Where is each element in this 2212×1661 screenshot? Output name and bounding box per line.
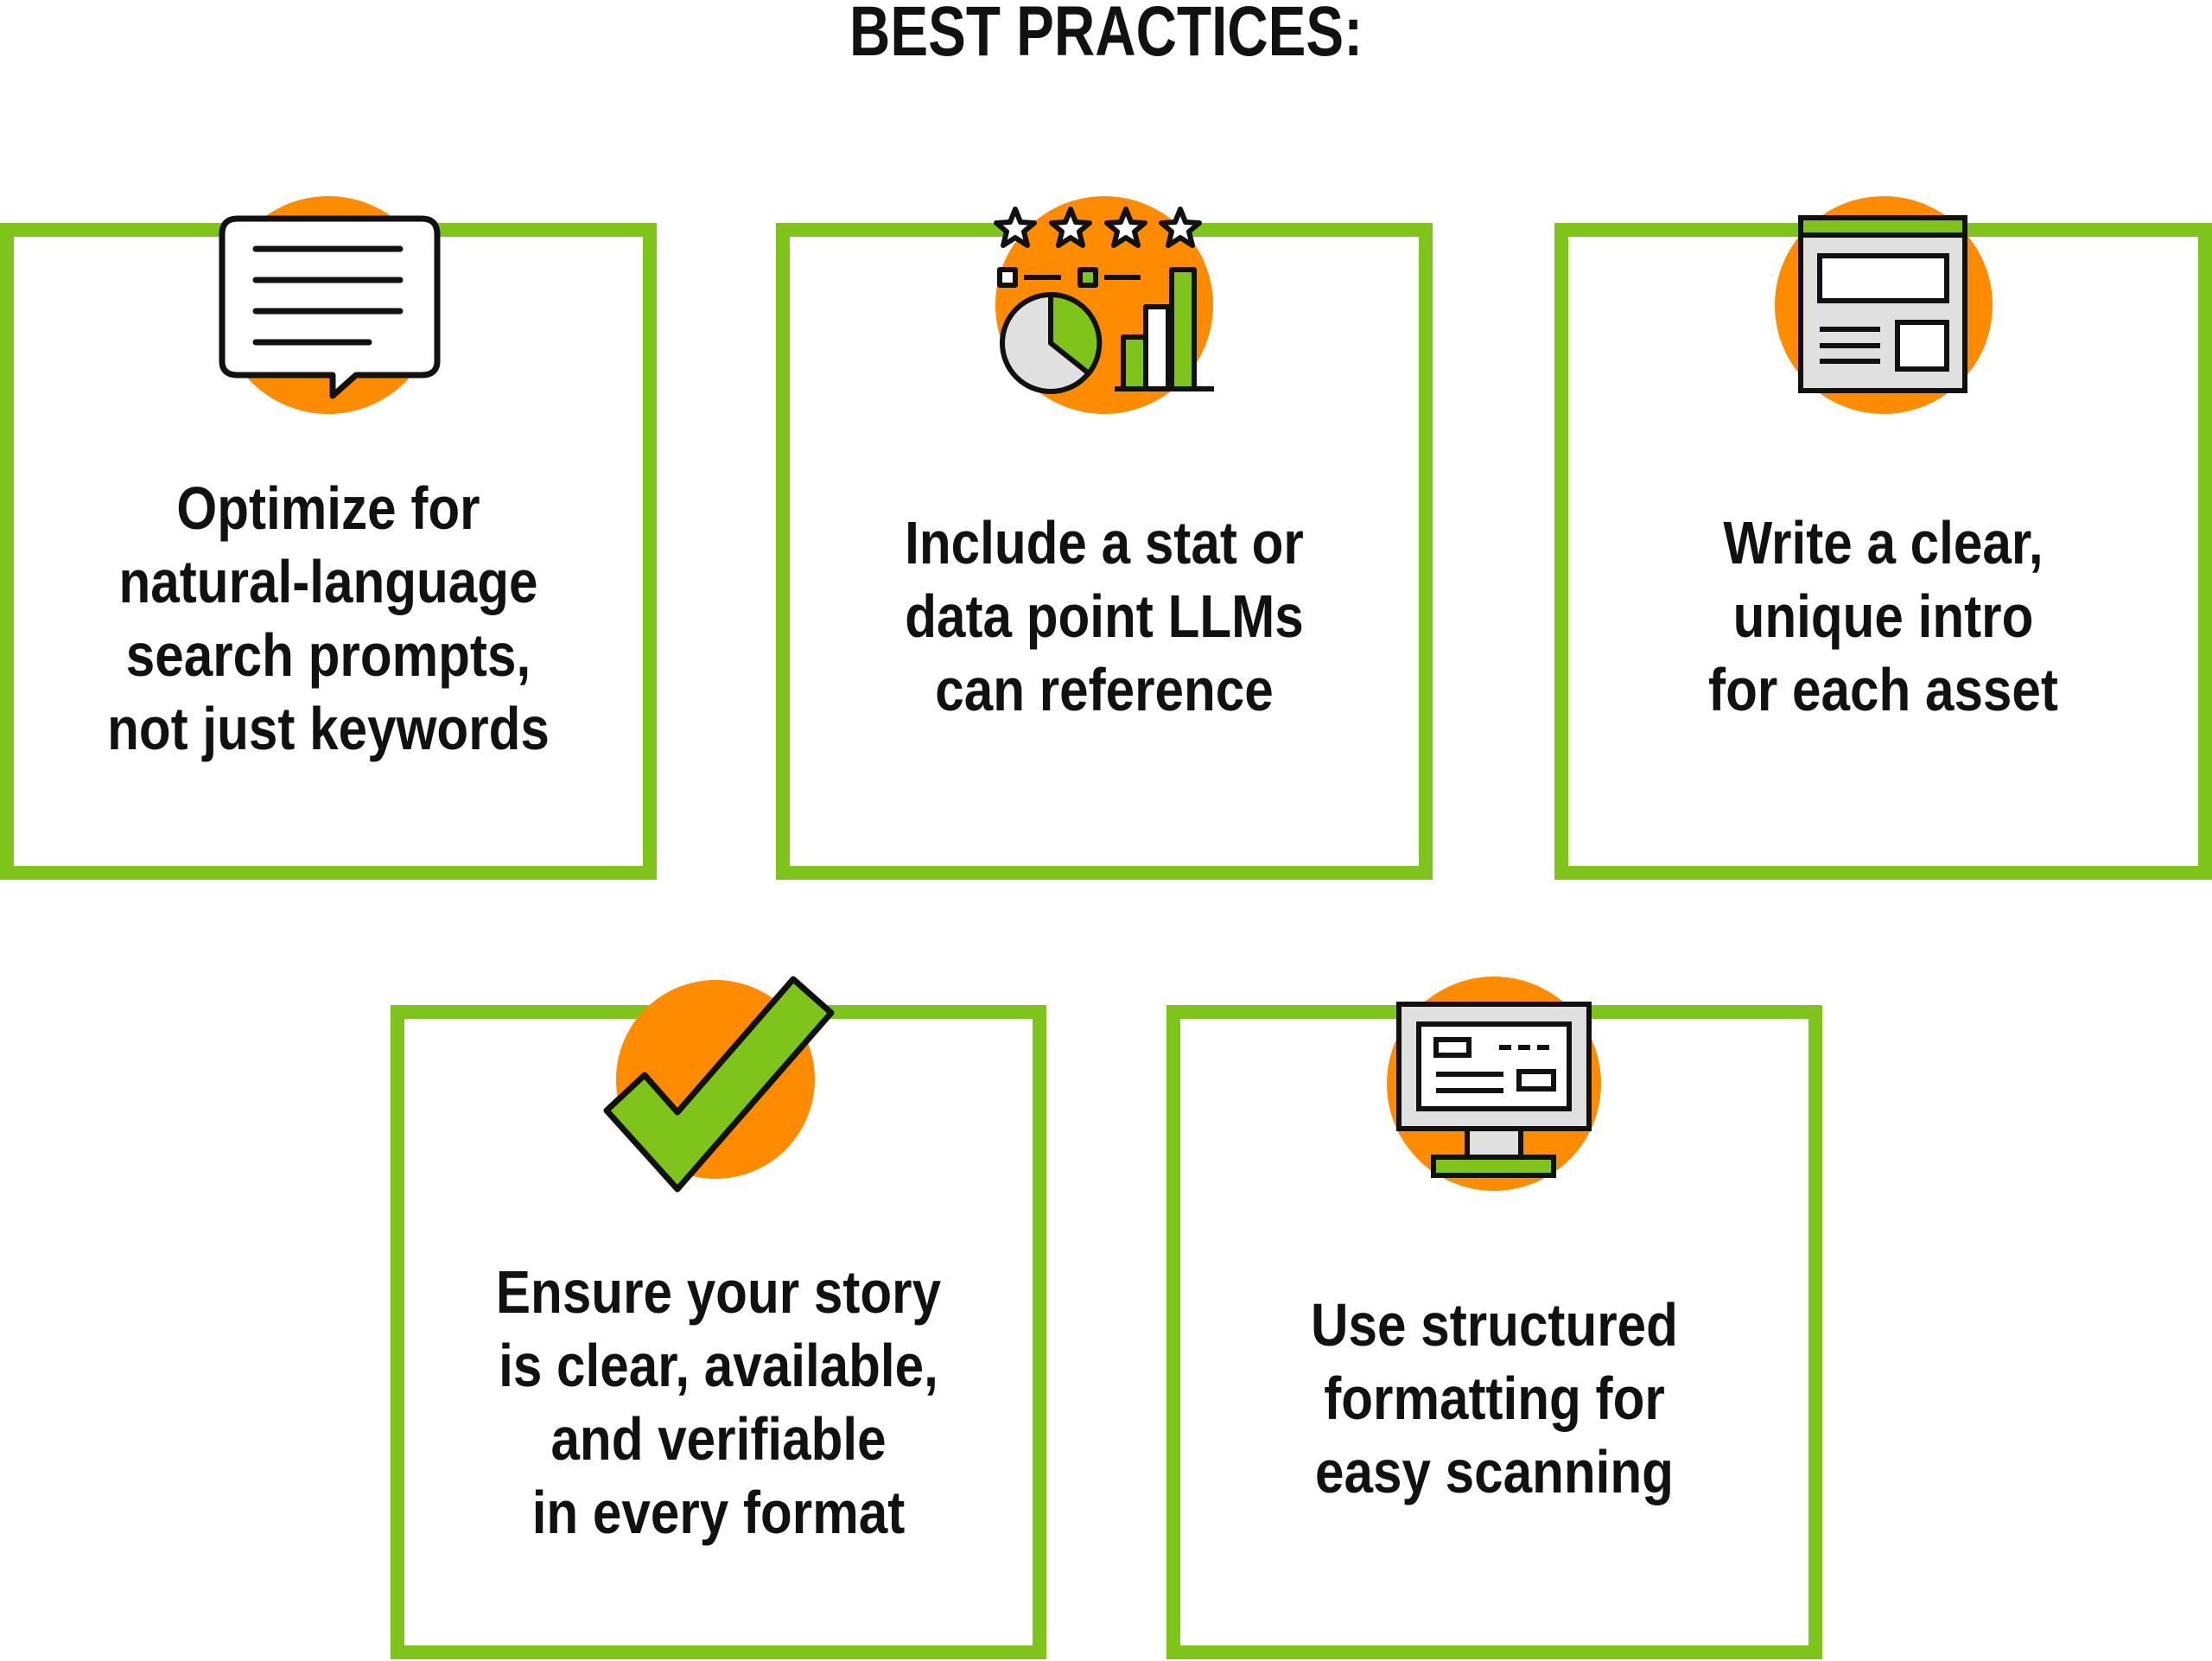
text: structured: Use structured <box>1311 1291 1678 1359</box>
text: story <box>496 1258 941 1546</box>
icon: speech bubble <box>219 196 437 414</box>
text: story: in every format <box>532 1479 905 1546</box>
text: story: is clear, available, <box>499 1332 938 1399</box>
text: natural language: Optimize for <box>176 474 480 542</box>
text: natural language <box>107 474 550 762</box>
text: stat: can reference <box>935 656 1274 723</box>
icon: document <box>1775 196 1993 414</box>
text: intro: for each asset <box>1708 656 2058 723</box>
text: stat: Include a stat or <box>905 509 1304 576</box>
text: stat: data point LLMs <box>905 582 1304 650</box>
panel: structured <box>1166 1005 1822 1659</box>
icon: checkmark <box>607 979 831 1189</box>
text: structured: easy scanning <box>1315 1438 1674 1505</box>
text: stat <box>905 509 1304 723</box>
panel: stat <box>776 223 1433 880</box>
text: natural language: search prompts, <box>126 621 531 689</box>
text: structured <box>1311 1291 1678 1505</box>
icon: monitor <box>1387 977 1601 1191</box>
text: story: and verifiable <box>550 1405 887 1473</box>
panel: story <box>391 1005 1046 1659</box>
panel: natural language <box>0 223 657 880</box>
text: structured: formatting for <box>1324 1365 1665 1432</box>
icon: stats chart <box>995 196 1214 414</box>
text: intro <box>1708 509 2058 723</box>
panel: intro <box>1554 223 2212 880</box>
text: natural language: natural-language <box>118 548 538 615</box>
text: intro: Write a clear, <box>1723 509 2044 576</box>
text: story: Ensure your story <box>496 1258 941 1326</box>
text: natural language: not just keywords <box>107 695 550 762</box>
text: intro: unique intro <box>1733 582 2033 650</box>
